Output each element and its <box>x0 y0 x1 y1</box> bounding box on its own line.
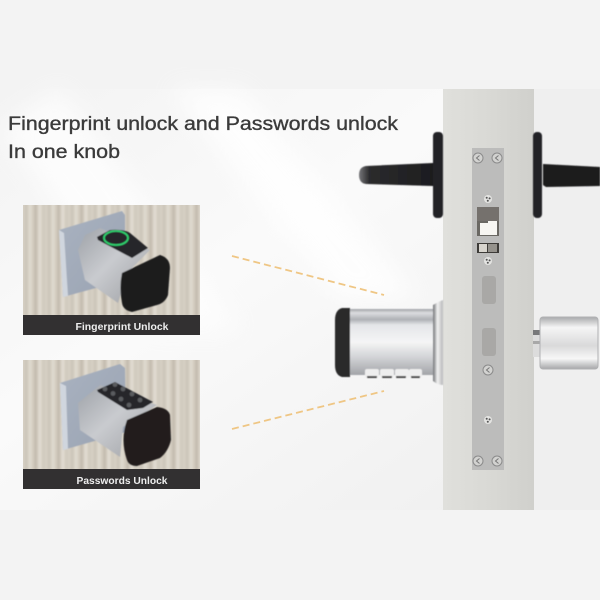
background panel <box>0 89 600 510</box>
caption: Fingerprint Unlock <box>76 322 169 333</box>
caption bar <box>23 315 200 335</box>
caption bar <box>23 469 200 489</box>
title <box>8 113 398 163</box>
icon: fingerprint knob <box>59 211 170 312</box>
wood photo background <box>23 205 200 315</box>
latch opening <box>477 207 499 222</box>
right lever handle <box>533 132 600 218</box>
screws <box>473 153 483 163</box>
keypad keys <box>365 369 422 378</box>
deadbolt slots <box>482 276 496 304</box>
panel: passwords unlock <box>20 355 204 489</box>
title: In one knob <box>8 141 120 163</box>
panel: fingerprint unlock <box>20 200 204 335</box>
smart knob <box>335 300 443 385</box>
inner thumb turn <box>533 317 598 369</box>
icon: keypad knob <box>60 364 171 466</box>
arrow: dashed line from fingerprint panel <box>232 256 384 295</box>
wood photo background <box>23 360 200 469</box>
left lever handle <box>359 132 443 218</box>
lower latch slot <box>477 243 499 253</box>
arrow: dashed line from passwords panel <box>232 391 384 429</box>
mortise plate <box>472 148 504 470</box>
door edge <box>443 89 534 510</box>
caption: Passwords Unlock <box>76 476 168 487</box>
title: Fingerprint unlock and Passwords unlock <box>8 113 398 135</box>
